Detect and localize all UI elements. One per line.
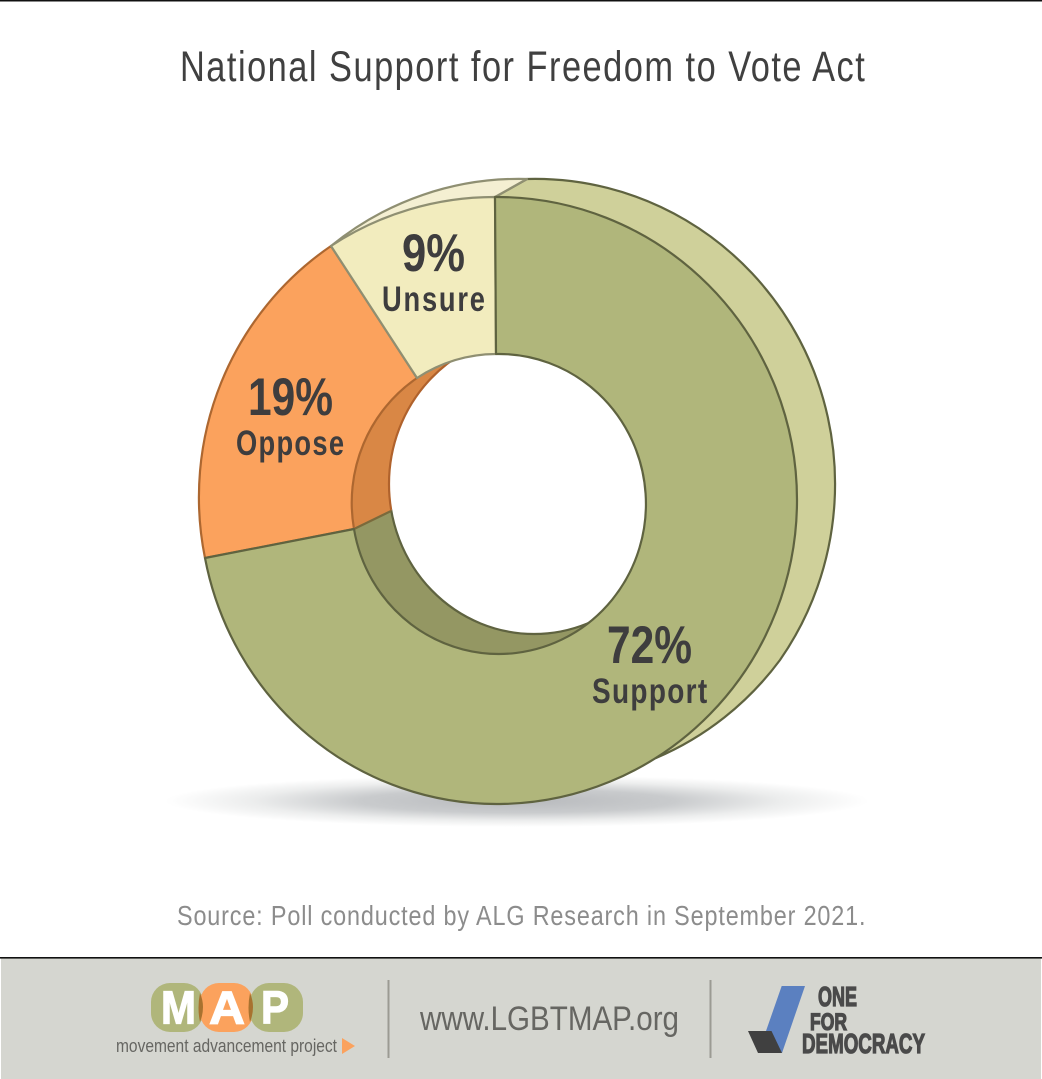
donut chart [199, 179, 835, 804]
inner wall [352, 362, 645, 653]
inner wall: support [355, 510, 582, 653]
back face: unsure side [331, 179, 527, 246]
logo: One for Democracy [748, 981, 925, 1059]
slice: oppose [199, 246, 417, 558]
logo tile: A [200, 983, 253, 1032]
label: oppose [236, 368, 344, 463]
logo tagline: movement advancement project [116, 1036, 337, 1056]
label: unsure: 9% [402, 224, 465, 283]
top border [0, 0, 1042, 2]
source note: Source: Poll conducted by ALG Research in September 2021. [177, 901, 866, 931]
logo: MAP [116, 982, 355, 1056]
logo letters: P [261, 982, 289, 1034]
hole edge: support [390, 509, 588, 636]
check mark: blue stroke [766, 986, 805, 1053]
logo wordmark: DEMOCRACY [802, 1028, 925, 1059]
slice: unsure [331, 197, 496, 378]
logo letters: M [161, 982, 196, 1034]
logo arrow [342, 1038, 355, 1054]
label: unsure: Unsure [382, 280, 485, 319]
label: oppose: Oppose [236, 424, 344, 463]
website: www.LGBTMAP.org [419, 1000, 679, 1038]
logo letters [161, 982, 289, 1034]
label: support: Support [592, 671, 708, 711]
slice: support [205, 197, 797, 804]
label: support [592, 616, 708, 711]
logo overlaps [198, 993, 253, 1022]
label: unsure [382, 224, 485, 319]
title: National Support for Freedom to Vote Act [180, 43, 865, 91]
logo wordmark: ONE [818, 981, 857, 1012]
wall divider [354, 511, 391, 529]
logo wordmark [802, 981, 925, 1059]
back face: support side [495, 179, 835, 758]
check mark: dark stroke [748, 1031, 782, 1053]
label: support: 72% [607, 616, 692, 675]
label: oppose: 19% [248, 368, 333, 427]
divider left [388, 980, 390, 1058]
inner wall: oppose [352, 365, 444, 528]
logo tile: P [250, 983, 303, 1032]
footer band [0, 957, 1042, 1079]
hole [390, 355, 645, 633]
ground shadow [165, 775, 869, 827]
logo tile: M [151, 983, 203, 1032]
hole edge: oppose [388, 362, 451, 511]
logo wordmark: FOR [810, 1009, 847, 1036]
logo letters: A [209, 982, 245, 1034]
divider right [710, 980, 712, 1058]
